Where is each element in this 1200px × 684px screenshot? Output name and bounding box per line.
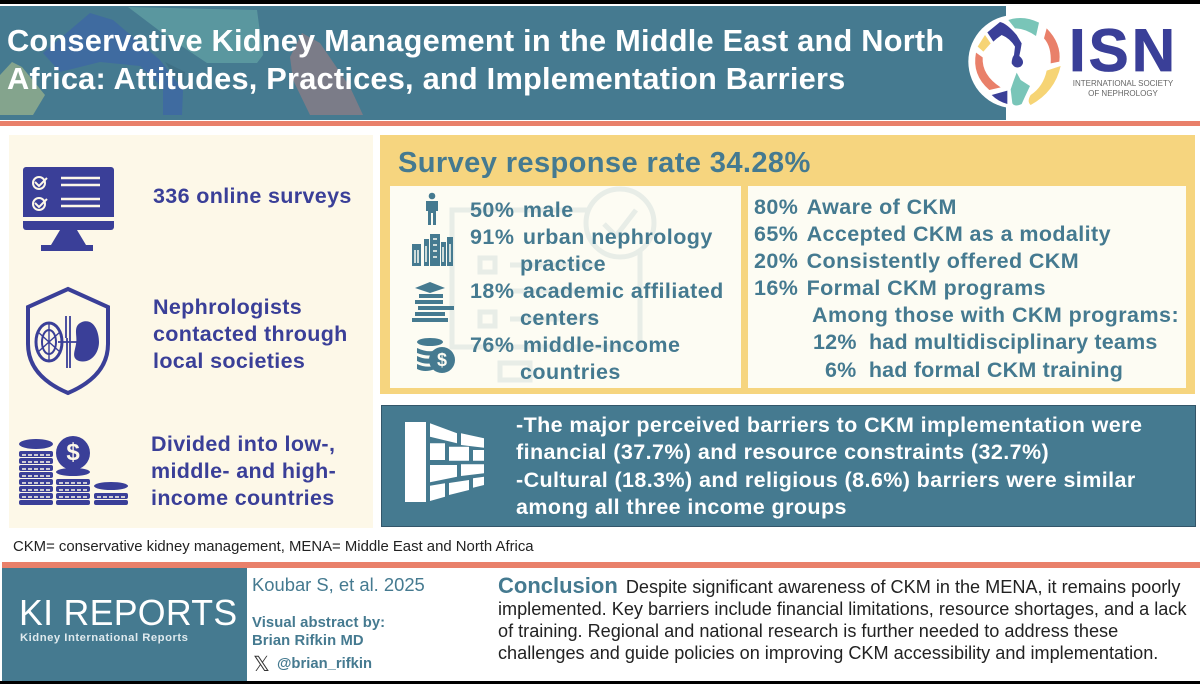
- title: Conservative Kidney Management in the Middle East and North: [7, 23, 944, 58]
- X handle: [253, 653, 372, 676]
- footer salmon rule: [2, 562, 1200, 568]
- conclusion: challenges and guide policies on improving CKM accessibility and implementation.: [498, 643, 1158, 663]
- text: income groups: [151, 432, 336, 510]
- barriers text: financial (37.7%) and resource constraints (32.7%): [516, 440, 1049, 464]
- footnote: CKM= conservative kidney management, MENA= Middle East and North Africa: [13, 539, 534, 555]
- stat list: centers: [520, 306, 600, 330]
- conclusion: Conclusion Despite significant awareness of CKM in the MENA, it remains poorly: [498, 573, 1180, 598]
- X glyph: 𝕏: [253, 653, 270, 676]
- CKM attitudes box: [748, 186, 1186, 388]
- KI Reports logo panel: [2, 568, 247, 681]
- icon: brick wall: [405, 422, 484, 502]
- top black bar: [0, 0, 1200, 4]
- CKM stats: Among those with CKM programs:: [812, 303, 1179, 327]
- icon: person: [426, 192, 438, 225]
- CKM stats: 65% Accepted CKM as a modality: [754, 222, 1111, 246]
- barriers text: [516, 413, 1142, 519]
- stat list: practice: [520, 252, 606, 276]
- logo subtitle: INTERNATIONAL SOCIETY: [1073, 79, 1173, 88]
- logo subtitle: OF NEPHROLOGY: [1088, 88, 1158, 98]
- conclusion: of training. Regional and national research is further needed to address these: [498, 621, 1118, 641]
- CKM stats: 12% had multidisciplinary teams: [813, 330, 1158, 354]
- KI Reports subtitle: Kidney International Reports: [20, 632, 188, 644]
- demographics box: [390, 186, 741, 388]
- text: income groups: middle- and high-: [151, 459, 336, 483]
- icon: academic books: [412, 282, 454, 322]
- ISN logo: [968, 16, 1178, 108]
- text: nephrologists: contacted through: [153, 322, 348, 346]
- heading: response rate: Survey response rate 34.28%: [398, 147, 811, 179]
- citation: Koubar S, et al. 2025: [252, 574, 425, 595]
- stat list: 50% male: [470, 198, 574, 222]
- CKM stats: 20% Consistently offered CKM: [754, 249, 1079, 273]
- dollar sign: $: [66, 439, 80, 466]
- stat list: 76% middle-income: [470, 333, 680, 357]
- icon: survey monitor: [23, 167, 114, 251]
- text: surveys: 336 online surveys: [153, 184, 352, 208]
- header banner: [0, 6, 1006, 120]
- panel: survey response: [380, 135, 1195, 394]
- text: income groups: income countries: [151, 486, 335, 510]
- visual abstract credit: Visual abstract by:: [252, 615, 385, 631]
- barriers text: -Cultural (18.3%) and religious (8.6%) barriers were similar: [516, 468, 1136, 492]
- CKM stats: 80% Aware of CKM: [754, 195, 957, 219]
- bottom black bar: [0, 681, 1200, 684]
- logo subtitle: [1073, 79, 1173, 98]
- text: nephrologists: local societies: [153, 349, 305, 373]
- logo wordmark: ISN: [1069, 17, 1178, 84]
- barriers text: among all three income groups: [516, 495, 847, 519]
- conclusion: implemented. Key barriers include financial limitations, resource shortages, and a lack: [498, 599, 1186, 619]
- stat list: 18% academic affiliated: [470, 279, 724, 303]
- handle: @brian_rifkin: [277, 656, 372, 672]
- title: [7, 23, 944, 96]
- stat list: countries: [520, 360, 621, 384]
- visual abstract credit: [252, 615, 385, 649]
- watermark checklist: [450, 186, 656, 382]
- title: Africa: Attitudes, Practices, and Implementation Barriers: [7, 61, 845, 96]
- stat list: [470, 198, 724, 384]
- panel: barriers: [381, 405, 1196, 527]
- text: income groups: Divided into low-,: [151, 432, 335, 456]
- CKM stats: 6% had formal CKM training: [825, 358, 1123, 382]
- CKM stats: [754, 195, 1179, 382]
- icon: kidney shield: [26, 286, 110, 396]
- text: nephrologists: [153, 295, 348, 373]
- icon: coin stacks: [19, 436, 128, 505]
- logo ring: [968, 16, 1061, 108]
- stat list: 91% urban nephrology: [470, 225, 713, 249]
- conclusion: [498, 573, 1186, 663]
- text: nephrologists: Nephrologists: [153, 295, 302, 319]
- header salmon rule: [0, 121, 1200, 126]
- panel: study methods: [9, 135, 373, 528]
- CKM stats: 16% Formal CKM programs: [754, 276, 1046, 300]
- visual abstract credit: Brian Rifkin MD: [252, 633, 364, 649]
- icon: coins with dollar: [417, 338, 455, 373]
- icon: coins with dollar: $: [437, 350, 447, 370]
- KI Reports wordmark: KI REPORTS: [19, 593, 238, 633]
- header decorative shapes: [0, 7, 363, 115]
- icon: city buildings: [412, 234, 453, 266]
- barriers text: -The major perceived barriers to CKM implementation were: [516, 413, 1142, 437]
